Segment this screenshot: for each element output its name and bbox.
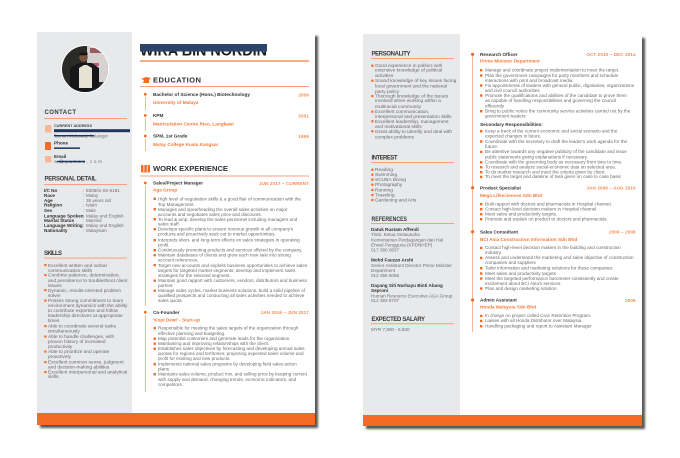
skills list: Able to prioritize and operate [48,349,110,355]
job: sales consultant [471,229,636,291]
job: co-founder: Maintaining and improving relationships with the client. [158,341,269,346]
job: research officer: To do market research and meet the criteria given by client. [485,170,606,174]
profile photo [61,45,109,94]
job: sales project manager: qualified prospects and conducting all sales activities needed to achieve [158,293,305,298]
personal detail table: : [83,193,84,198]
job: sales project manager: strategies for the selected segment. [158,273,231,278]
skills list [44,263,128,380]
job: research officer: Coordinate with the governing body as necessary from time to time. [485,160,622,164]
job: research officer: Promote the qualifications and abilities of the candidate to prove them [485,93,627,98]
icon: graduation cap [141,77,151,83]
personal detail table: Religion [44,203,62,208]
job: sales project manager: Interprets short- and long-term effects on sales strategies in operating [158,238,300,242]
heading: work experience: WORK EXPERIENCE [153,164,228,173]
skills list: productivity [48,344,73,350]
job: sales project manager: Maintain good rapport with customers, vendors, distributors and business [158,278,308,283]
page shadow [366,38,645,429]
job: sales consultant: Plan and design marketing solution [485,286,557,291]
skills list: issues [48,283,62,289]
job: product specialist: Meet sales and productivity targets. [485,212,557,216]
job: research officer: Bring to public notice the community service activities carried out by the [485,108,631,114]
job: product specialist: Promote and explain on product to doctors and pharmacists. [485,216,608,222]
skills list: leadership directives at appropriate [48,313,123,319]
personality list: party policy [375,89,400,95]
personal detail table: Malay and English [86,214,124,218]
job: admin assistant: In charge on project called Civic Retention Program. [485,313,591,318]
personal detail table: : [83,203,84,208]
personality list [371,63,457,140]
job: research officer: as capable of handling responsibilities and governing the council [485,98,616,103]
references list: Timb. Ketua Setiausaha [371,232,420,237]
references list: Human Resource Executive AGA Group [371,294,453,298]
job: research officer: government leaders [485,114,526,118]
job: sales project manager: Aga Group [153,188,177,193]
personal detail table: Nationality [44,228,68,233]
education timeline: 1999 [298,134,309,139]
personal detail table: 830801-02-5181 [86,188,120,193]
personal detail table: Race [44,193,55,198]
skills list: Excellent written and verbal [48,263,107,269]
heading: skills: SKILLS [44,251,62,257]
skills list: skills. [48,374,60,380]
education timeline: SPM, 1st Grade [153,134,188,139]
job: product specialist: Mega Lifesciences Sdn Bhd [480,193,542,198]
job: co-founder: 'Kopi Dewi' - Start-up [153,317,200,322]
job: co-founder: quotas for regions and territories; projecting expected sales volume and [158,351,304,356]
personal detail table: Marital Status [44,218,75,223]
interest list: Gardening and Arts [375,198,417,204]
job: sales consultant: companies and suppliers [485,260,537,265]
job: co-founder: Maintains sales volume, product mix, and selling price by keeping current [158,372,308,376]
references list: Senior Assistant Director Prime Minister [371,263,452,268]
personal detail table: : [83,214,84,218]
job: admin assistant [471,298,636,328]
job: sales consultant: Contact high-level decision makers in the building and construction [485,245,621,250]
contact email: Email [54,154,66,159]
job: admin assistant: Admin Assistant [480,298,517,303]
skills list: Excellent common sense, judgment [48,360,124,366]
education timeline: Bachelor of Science (Hons.) Biotechnology [153,92,250,97]
job: sales project manager: Target new accounts and exploits business opportunities to achieve sales [158,263,308,268]
job: sales project manager: Top Management. [158,202,195,207]
panel: resume page 1 [37,32,318,428]
skills list: Able to coordinate several tasks [48,324,117,330]
skills list: communication skills [48,268,93,274]
job: research officer: efficiently [485,104,505,108]
personality list: Good experience in politics with [375,63,443,69]
job: product specialist: Product Specialist [480,185,521,190]
job: sales consultant: Tailor information and marketing solutions for these companies [485,266,613,270]
references list [371,227,453,303]
job: co-founder: plans. [158,366,170,372]
job: research officer: future. [485,144,498,149]
job: sales project manager: Manages and spearheading the overall sales activities on major [158,207,288,212]
job: product specialist: Built rapport with doctors and pharmacists in Hospital channel. [485,202,612,206]
job: sales project manager: Continuously promoting products and services offered by the company. [158,248,302,252]
job: research officer: Plan the government campaigns for party members and schedule [485,73,618,78]
job: co-founder: JAN 2016 – JUN 2017 [261,310,309,315]
references list: Ehwal Pengguna (KPDNHEP) [371,242,433,248]
job: sales consultant: industry. [485,250,502,255]
references list: Department [371,268,396,273]
personal detail table: Male [86,208,96,213]
job: sales project manager: profit. [158,242,170,248]
expected salary value: MYR 7,500 - 8,500 [371,327,410,332]
job: sales project manager: accounts and negotiates sales price and discounts. [158,212,262,217]
job: research officer: Secondary Responsibilities: [480,122,543,127]
interest list: Swimming [375,172,397,178]
references list: Seproni [371,288,388,293]
education timeline: Malay College Kuala Kangsar [153,142,219,147]
icon: address [45,125,52,132]
personality list: Great ability to identify and deal with [375,129,452,135]
job: research officer: Prime Minister Department [480,59,540,64]
job: product specialist [471,185,636,222]
page sheet [37,32,315,425]
personality list: complex problems [375,134,415,140]
skills list: solver [48,293,61,299]
job: product specialist: JAN 2009 – AUG 2010 [586,186,636,190]
personal detail table: : [83,218,84,223]
skills list: Posses strong commitment to team [48,298,123,304]
job: research officer: To meet the target and dateline of task given on case to case basis [485,174,622,179]
job: sales consultant: 2006 – 2008 [609,230,636,234]
interest list [371,167,417,204]
panel: resume page 2 [363,34,645,429]
job: co-founder: Co-Founder [153,310,180,315]
contact address [54,124,130,138]
job: research officer: Manage and coordinate project implementation to meet the target. [485,68,619,72]
job: sales project manager: High level of negotiation skills & a good flair of communication with the [158,196,301,202]
job: admin assistant: 2005 [625,298,636,303]
personal detail table [44,188,124,233]
job: sales project manager [144,181,309,306]
job: co-founder: with supply and demand, changing trends, economic indicators, and [158,377,297,382]
job: co-founder: effective planning and budgeting. [158,331,225,336]
job: co-founder: Implements national sales programs by developing field sales action [158,362,297,366]
job: sales project manager: targets for targeted market segments; develop and implement sales [158,268,296,273]
references list: 012 356 5056 [371,273,400,278]
name heading: WIRA BIN NORDIN [140,42,267,59]
job: sales project manager: Manage sales cycles, market business solutions, build a solid pipeline of [158,288,306,293]
job: co-founder: profit for existing and new products. [158,356,231,361]
personality list: Thorough knowledge of the issues [375,94,449,100]
education timeline: KPM [153,113,164,118]
job: sales consultant: Sales Consultant [480,229,518,234]
personal detail table: 38 years old [86,198,111,203]
job: sales project manager: products and proactively seek out to market opportunities. [158,232,276,236]
icon: phone [45,142,51,150]
interest list: Photography [375,182,403,188]
personal detail table: I/C No [44,188,57,193]
skills list: Combine patience, determination, [48,272,120,278]
skills list: proven history of increased [48,339,106,345]
heading: interest: INTEREST [372,156,398,162]
interest list: SCUBA Diving [375,177,406,183]
job: research officer: public statements giving explanations if necessary. [485,154,588,160]
job: research officer: expected changes in future. [485,134,541,138]
job: product specialist: Contact high-level decision makers in Hospital channel. [485,206,598,212]
personal detail table: : [83,208,84,213]
job: sales project manager: sales staff. [158,222,180,226]
references list: Dayang Siti Nurhayu Binti Abang [371,283,443,288]
sidebar background [363,34,460,415]
heading: education: EDUCATION [153,75,201,84]
job: research officer: To research and analyze social-economic data on selected area. [485,164,616,170]
references list: Datuk Rustam Affendi [371,227,419,232]
skills list: simultaneously [48,328,80,334]
personal detail table: Age [44,198,53,203]
name heading [140,42,309,62]
personal detail table: Language Writing [44,223,83,228]
skills list: proactively [48,354,72,360]
job: sales project manager: To lead & amp; develop the sales personnel including managers and [158,217,298,222]
job: sales consultant: Meet sales and productivity targets [485,271,557,276]
footer band [37,413,315,425]
references list: Mohd Fauzan Arshi [371,258,413,262]
job: research officer: Coordinate with the secretary to draft the leader's work agenda for the [485,139,628,144]
job: research officer: Be attentive towards any negative publicity of the candidate and issue [485,149,627,154]
skills list: environment dynamics with the ability [48,303,128,309]
personality list: involved when working within a [375,98,441,104]
footer band [363,415,642,426]
personal detail table: Malay [86,193,99,198]
job: co-founder: Map potential customers and generate leads for the organization. [158,336,291,341]
education timeline [144,92,309,151]
heading: references: REFERENCES [372,217,407,223]
personal detail table: Married [86,218,102,223]
references list: 017 380 0837 [371,248,400,252]
personality list: and motivational skills [375,124,422,130]
job: research officer [471,52,636,179]
contact phone [54,140,80,149]
contact email: w@yahoo.com [54,159,102,164]
personality list: multiracial community [375,104,422,110]
education timeline: 2006 [298,92,309,98]
skills list: and decision-making abilities [48,364,110,370]
job: sales consultant: Meet the targeted performance barometer consistently and create [485,276,619,281]
education timeline: Matriculation Centre Riso, Langkawi [153,122,234,127]
job: co-founder: competitors. [158,382,183,387]
job: sales project manager: Develops specific plans to ensure revenue growth in all company's [158,226,294,232]
job: research officer: Keep a track of the current economic and social scenario and the [485,128,618,134]
personality list: activities [375,73,394,79]
interest list: Reading [375,167,393,173]
contact address: Taman Melawati, Selangor [54,134,108,138]
personal detail table: : [83,188,84,193]
main timeline line [471,55,474,332]
personality list: interpersonal and presentation skills [375,114,452,120]
heading: expected salary: EXPECTED SALARY [372,317,425,323]
personal detail table: Islam [86,203,97,208]
job: co-founder: Establishes sales objectives by forecasting and developing annual sales [158,346,305,351]
contact address: CURRENT ADDRESS [54,124,92,128]
page sheet [363,34,642,426]
references list: Kementerian Perdagangan dan Hal [371,238,443,242]
personal detail table: Malaysian [86,228,107,233]
education timeline: 2001 [298,114,309,118]
personal detail table: : [83,223,84,228]
page shadow [40,36,318,428]
job: admin assistant: Handling packaging and report to Assistant Manager [485,324,592,328]
job: sales project manager: Maintain databases of clients and grow each new sale into strong [158,252,291,258]
sidebar background [37,32,132,413]
skills list: Excellent interpersonal and analytical [48,370,127,376]
personality list: local government and the national [375,84,447,90]
job: sales project manager: account references. [158,258,198,262]
icon: email [45,156,52,162]
job: co-founder [144,310,309,392]
skills list: times [48,318,60,324]
job: research officer: and civil council authorities [485,88,540,93]
job: admin assistant: Liaises with all Honda Distributor over Malaysia. [485,318,583,323]
personality list: Excellent leadership, management [375,119,449,125]
job: admin assistant: Honda Malaysia Sdn Bhd [480,304,536,309]
heading: personality: PERSONALITY [372,52,410,58]
job: sales project manager: Sales/Project Manager [153,181,203,186]
icon: briefcase [141,165,150,172]
contact email [54,154,102,164]
job: research officer: interactions with print and broadcast media. [485,78,574,83]
references list: 012 383 8707 [371,298,400,303]
heading: contact: CONTACT [44,110,76,116]
skills list: Dynamic, results-oriented problem [48,288,121,294]
personality list: extensive knowledge of political [375,68,442,74]
skills list: and persistence to troubleshoot client [48,278,128,284]
personality list: Sound knowledge of key issues facing [375,78,457,84]
job: research officer: Research Officer [480,52,518,57]
personal detail table: : [83,228,84,233]
job: sales consultant: BCI Asia Construction Information Sdn Bhd [480,237,577,242]
personal detail table: Sex [44,208,53,213]
contact phone: Phone [54,140,68,146]
personal detail table: Malay and English [86,223,124,228]
heading: personal detail: PERSONAL DETAIL [44,176,97,182]
job: sales project manager: partner. [158,283,174,288]
personal detail table: Language Spoken [44,214,84,218]
job: sales consultant: excitement about BCI Asia's services. [485,281,561,286]
job: sales consultant: Assess and understand the marketing and sales objective of construction [485,255,634,260]
skills list: to contribute expertise and follow [48,308,119,314]
job: research officer: Fix appointments of leaders with general public, dignitaries, organizations [485,83,635,88]
interest list: Running [375,188,393,194]
skills list: Able to handle challenges, with [48,334,114,340]
interest list: Traveling [375,192,395,198]
personality list: Excellent communication, [375,109,429,115]
job: sales project manager: JUN 2017 – CURRENT [259,181,309,186]
job: co-founder: Responsible for meeting the sales targets of the organization through [158,326,299,330]
job: sales project manager: sales quota. [158,298,183,303]
personal detail table: : [83,198,84,203]
job: research officer: OCT 2010 – DEC 2014 [586,52,636,57]
education timeline: University of Malaya [153,100,199,105]
